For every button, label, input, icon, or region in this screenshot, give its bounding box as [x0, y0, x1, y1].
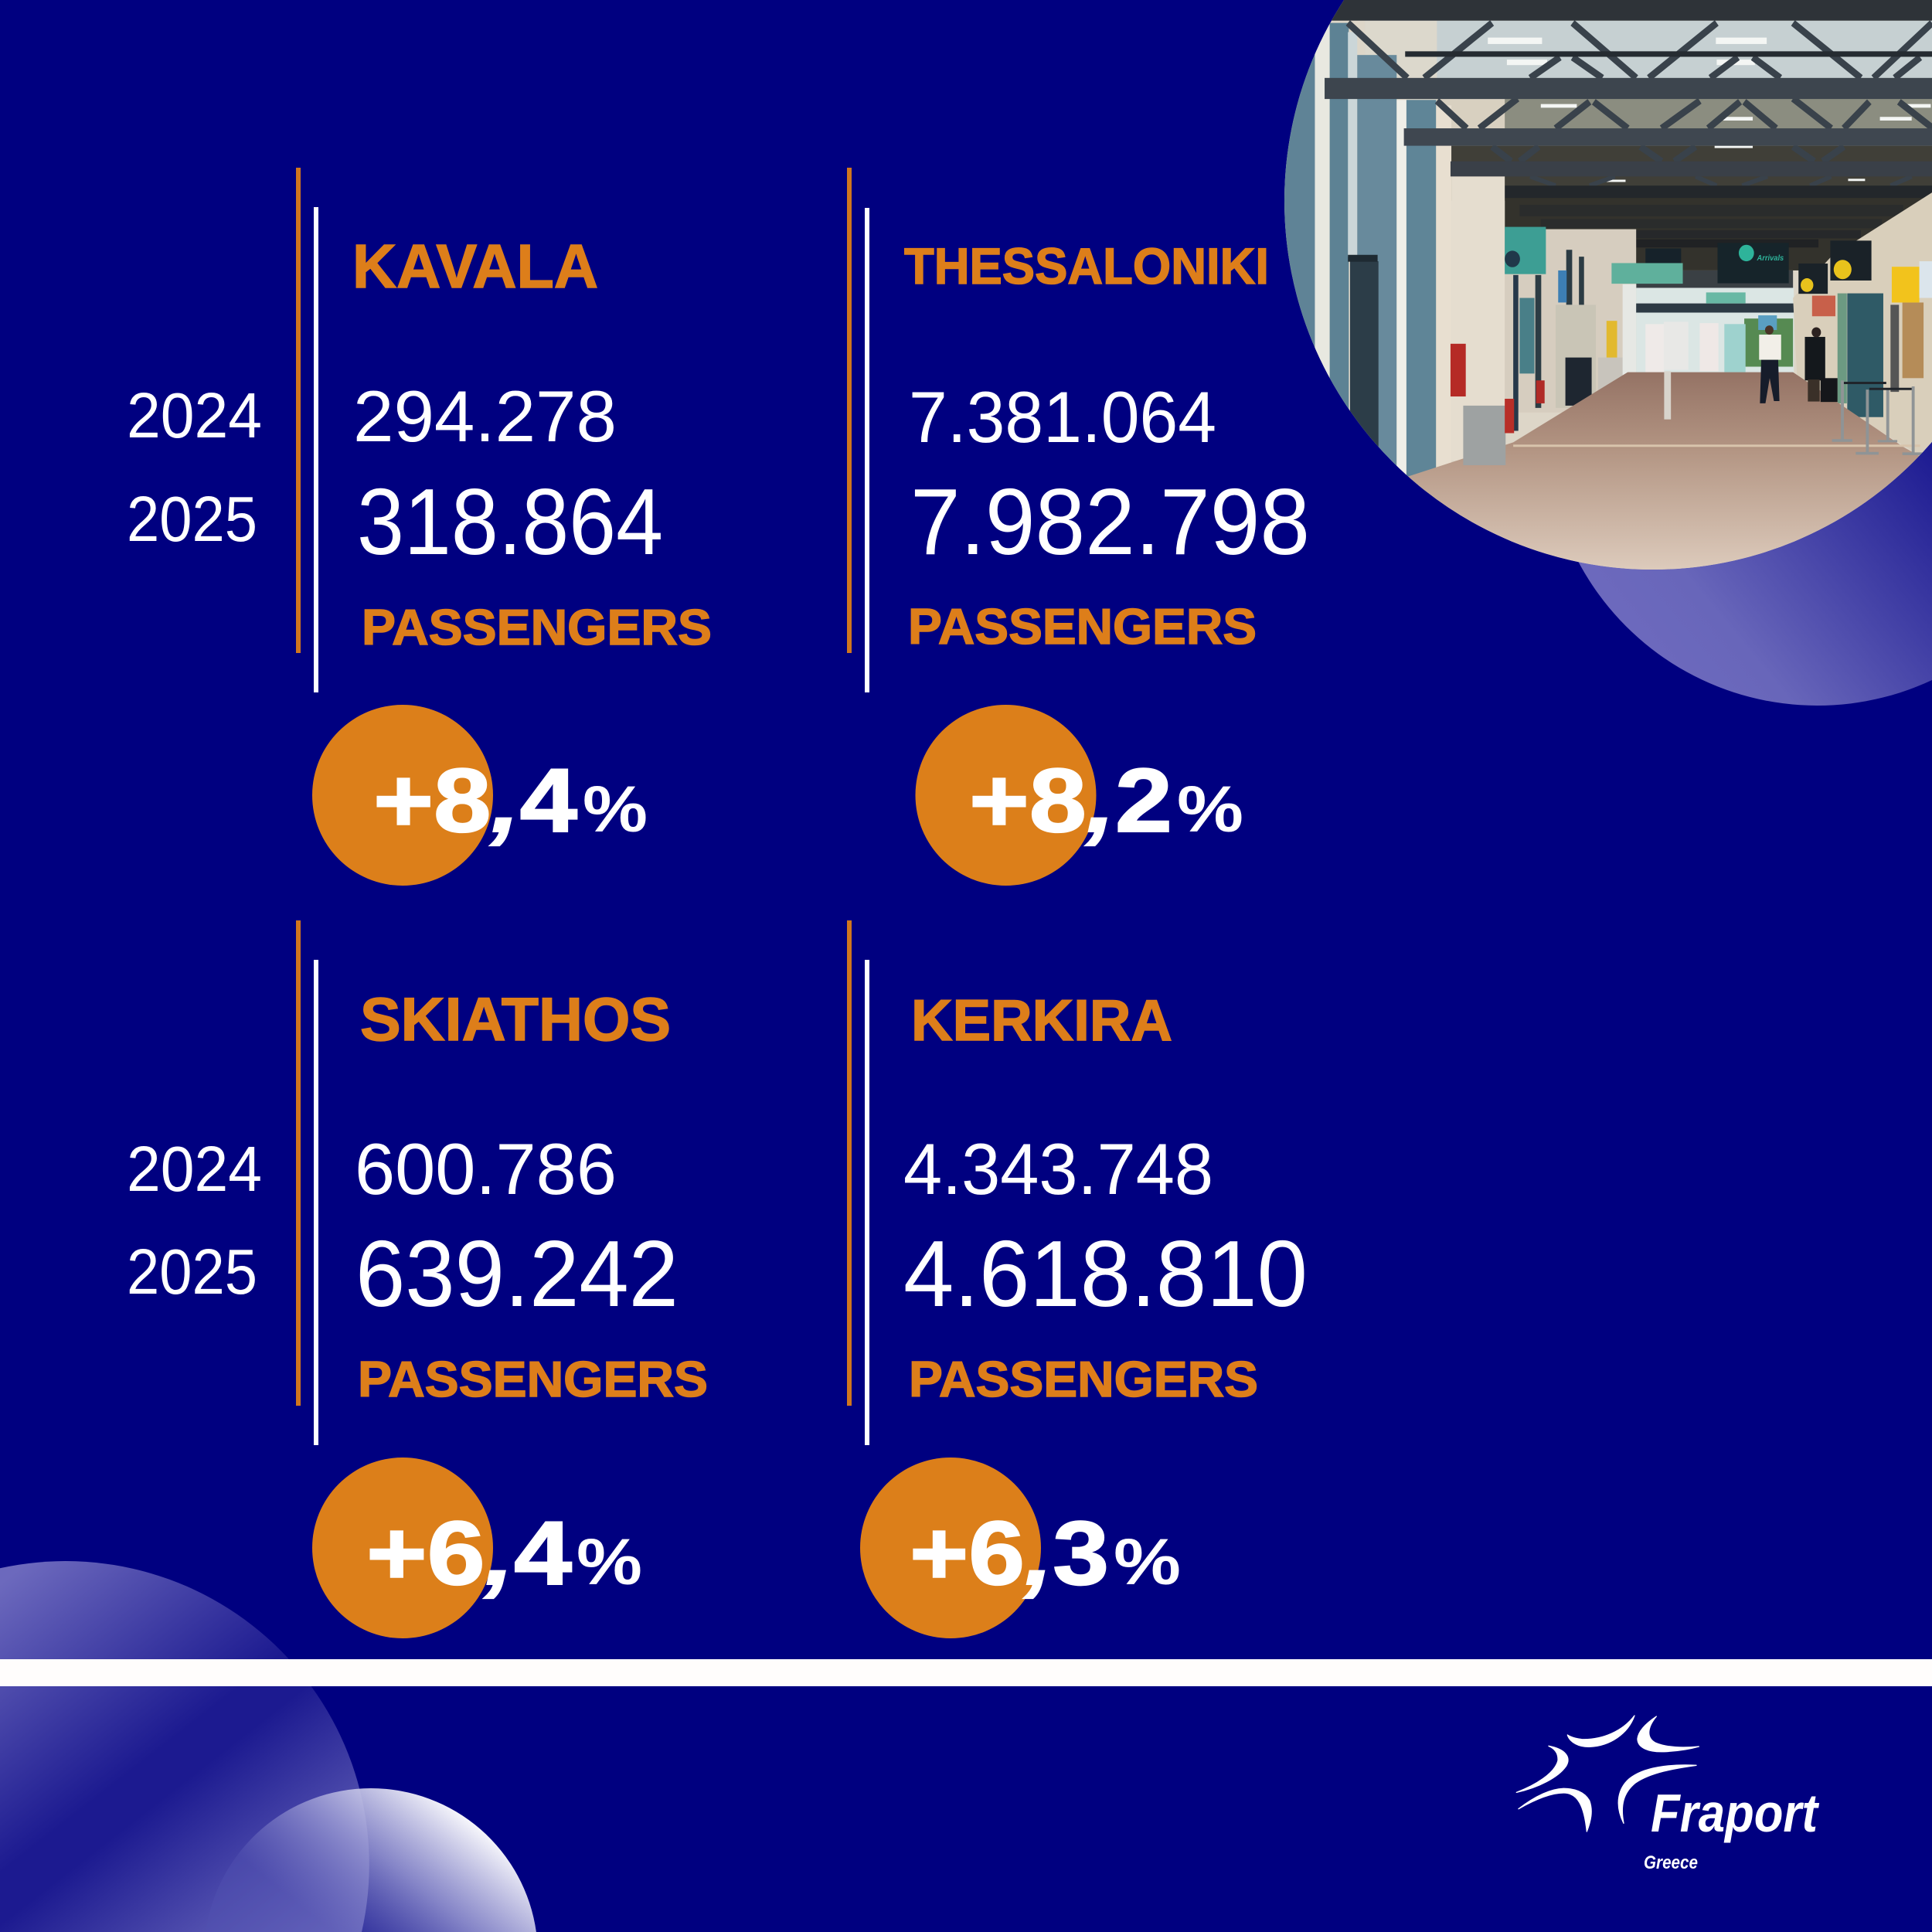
far opening	[1623, 284, 1636, 376]
passengers label: PASSENGERS	[362, 599, 712, 655]
logo subtitle: Greece	[1644, 1852, 1698, 1873]
value 2024: 294.278	[353, 376, 617, 457]
heading: Kavala: KAVALA	[352, 232, 598, 301]
growth percentage: +8,2	[969, 750, 1172, 851]
roof beams	[1331, 0, 1932, 21]
heading: Thessaloniki: THESSALONIKI	[904, 237, 1269, 294]
growth badge circle	[312, 705, 493, 886]
growth badge circle	[860, 1458, 1041, 1638]
logo wordmark: Fraport	[1651, 1783, 1819, 1843]
right wall	[1793, 192, 1932, 463]
growth percentage: %	[583, 773, 648, 845]
value 2024: 4.343.748	[903, 1128, 1213, 1209]
value 2025: 639.242	[355, 1221, 679, 1326]
passengers label: PASSENGERS	[358, 1351, 708, 1407]
year label 2024: 2024	[127, 379, 262, 451]
growth percentage: +8,4	[373, 750, 577, 851]
red box and bin	[1451, 344, 1466, 396]
photo: airport terminal corridor: Arrivals	[1757, 254, 1784, 263]
photo: airport terminal corridor	[1284, 0, 1932, 570]
year label 2025: 2025	[127, 483, 257, 555]
heading: Skiathos: SKIATHOS	[360, 985, 671, 1053]
logo: Fraport Greece	[1516, 1716, 1819, 1873]
passengers label: PASSENGERS	[909, 1351, 1258, 1407]
white divider bar	[0, 1659, 1932, 1686]
value 2024: 600.786	[355, 1128, 617, 1209]
hanging signs	[1505, 227, 1546, 274]
growth percentage: +6,3	[910, 1502, 1109, 1604]
growth badge circle	[915, 705, 1096, 886]
panel: Kerkira	[847, 920, 1308, 1638]
growth badge circle	[312, 1458, 493, 1638]
value 2025: 318.864	[357, 469, 663, 574]
growth percentage: %	[1177, 773, 1243, 845]
value 2025: 7.982.798	[910, 469, 1310, 574]
passengers label: PASSENGERS	[908, 598, 1257, 655]
decorative circle: bottom left large	[0, 1561, 369, 1932]
left corridor wall	[1451, 176, 1505, 229]
panel: Thessaloniki	[847, 168, 1310, 886]
decorative circle: bottom left small	[206, 1788, 536, 1932]
left glass wall	[1280, 23, 1451, 527]
panel: Skiathos	[127, 920, 708, 1638]
growth percentage: +6,4	[366, 1502, 572, 1604]
growth percentage: %	[1114, 1526, 1181, 1598]
people	[1759, 325, 1838, 403]
year label 2025: 2025	[127, 1236, 257, 1308]
floor	[1408, 372, 1920, 570]
value 2025: 4.618.810	[903, 1221, 1308, 1326]
ceiling lights	[1488, 38, 1930, 182]
year label 2024: 2024	[127, 1133, 262, 1205]
stanchions	[1832, 380, 1923, 455]
decorative circle: top right lilac	[1547, 165, 1932, 706]
banners	[1645, 324, 1664, 372]
panel: Kavala	[127, 168, 712, 886]
heading: Kerkira: KERKIRA	[911, 988, 1172, 1053]
icon: Fraport swooshes	[1516, 1716, 1699, 1832]
ceiling truss	[1348, 23, 1932, 185]
growth percentage: %	[577, 1526, 642, 1598]
value 2024: 7.381.064	[909, 376, 1216, 457]
